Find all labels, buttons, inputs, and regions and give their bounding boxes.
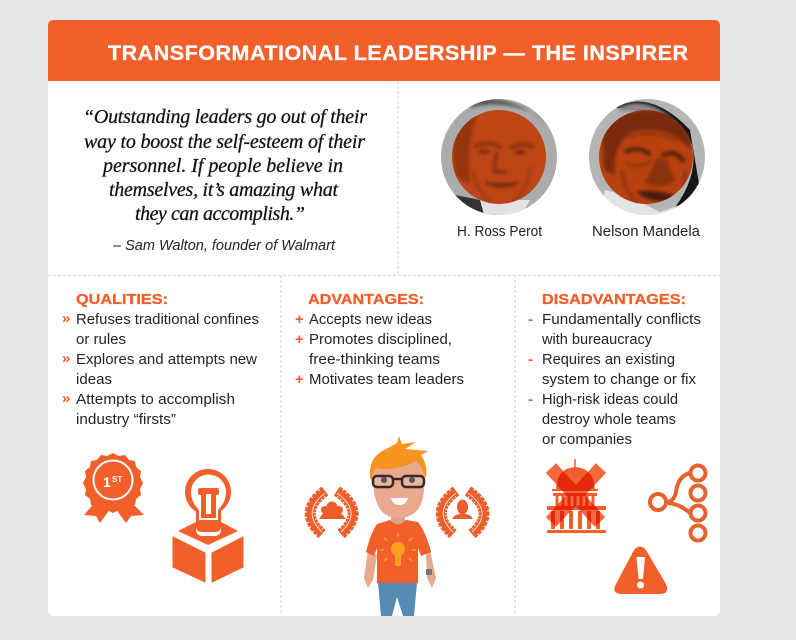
disadvantages list: [528, 311, 701, 448]
qualities list: or rules: [76, 331, 126, 348]
qualities list: Explores and attempts new: [76, 351, 257, 368]
qualities list: Attempts to accomplish: [76, 391, 235, 408]
disadvantages list: -: [528, 351, 533, 368]
advantages list: [295, 311, 464, 388]
illustration: character: [364, 436, 436, 616]
glasses: [373, 476, 424, 487]
heading: advantages: ADVANTAGES:: [308, 291, 424, 308]
disadvantages list: or companies: [542, 431, 632, 448]
panel: disadvantages: [528, 291, 706, 594]
qualities list: ideas: [76, 371, 112, 388]
advantages list: Motivates team leaders: [309, 371, 464, 388]
neck: [391, 510, 405, 524]
name: Nelson Mandela: Nelson Mandela: [592, 224, 701, 240]
advantages list: +: [295, 371, 304, 388]
portrait: H. Ross Perot: [440, 98, 558, 218]
header banner: [48, 20, 720, 81]
quote text: themselves, it’s amazing what: [109, 179, 338, 201]
t-shirt: [366, 520, 431, 583]
disadvantages list: -: [528, 311, 533, 328]
advantages list: free-thinking teams: [309, 351, 440, 368]
icon: first place ribbon: [83, 453, 144, 523]
shirt bulb: [380, 533, 416, 566]
advantages list: Accepts new ideas: [309, 311, 432, 328]
quote attribution: – Sam Walton, founder of Walmart: [112, 238, 336, 254]
panel: portraits: [440, 98, 705, 240]
disadvantages list: destroy whole teams: [542, 411, 676, 428]
quote text: [83, 106, 367, 225]
icon: individual laurel wreath: [441, 491, 484, 534]
disadvantages list: system to change or fix: [542, 371, 696, 388]
icon: first place ribbon: ST: [112, 475, 122, 484]
advantages list: +: [295, 311, 304, 328]
portrait: Nelson Mandela: [589, 98, 705, 220]
quote text: way to boost the self-esteem of their: [84, 131, 365, 153]
heading: disadvantages: DISADVANTAGES:: [542, 291, 686, 308]
hair: [370, 436, 428, 480]
panel: qualities: [62, 291, 259, 582]
icon: lightbulb in box: [173, 469, 243, 582]
panel: quote: [83, 106, 367, 254]
icon: team laurel wreath: [310, 491, 353, 534]
qualities list: Refuses traditional confines: [76, 311, 259, 328]
name: H. Ross Perot: H. Ross Perot: [457, 224, 542, 240]
panel: main card: [48, 20, 720, 616]
qualities list: »: [62, 310, 70, 327]
icon: branching nodes: [650, 466, 706, 540]
jeans: [378, 583, 417, 616]
heading: qualities: QUALITIES:: [76, 291, 168, 308]
qualities list: industry “firsts”: [76, 411, 176, 428]
disadvantages list: with bureaucracy: [541, 331, 652, 348]
qualities list: »: [62, 350, 70, 367]
icon: first place ribbon: 1: [103, 474, 111, 490]
advantages list: +: [295, 331, 304, 348]
disadvantages list: Fundamentally conflicts: [542, 311, 701, 328]
disadvantages list: High-risk ideas could: [542, 391, 678, 408]
icon: warning triangle: [614, 546, 667, 594]
disadvantages list: Requires an existing: [542, 351, 675, 368]
icon: crossed-out government building: [547, 459, 606, 533]
quote text: they can accomplish.”: [135, 203, 305, 225]
arms: [364, 550, 377, 588]
title: TRANSFORMATIONAL LEADERSHIP — THE INSPIRER: [108, 41, 688, 65]
qualities list: »: [62, 390, 70, 407]
smile: [391, 498, 408, 505]
disadvantages list: -: [528, 391, 533, 408]
quote text: “Outstanding leaders go out of their: [83, 106, 367, 128]
advantages list: Promotes disciplined,: [309, 331, 452, 348]
face: [372, 458, 425, 518]
qualities list: [62, 310, 259, 428]
panel: advantages: [295, 291, 484, 616]
quote text: personnel. If people believe in: [101, 155, 343, 177]
